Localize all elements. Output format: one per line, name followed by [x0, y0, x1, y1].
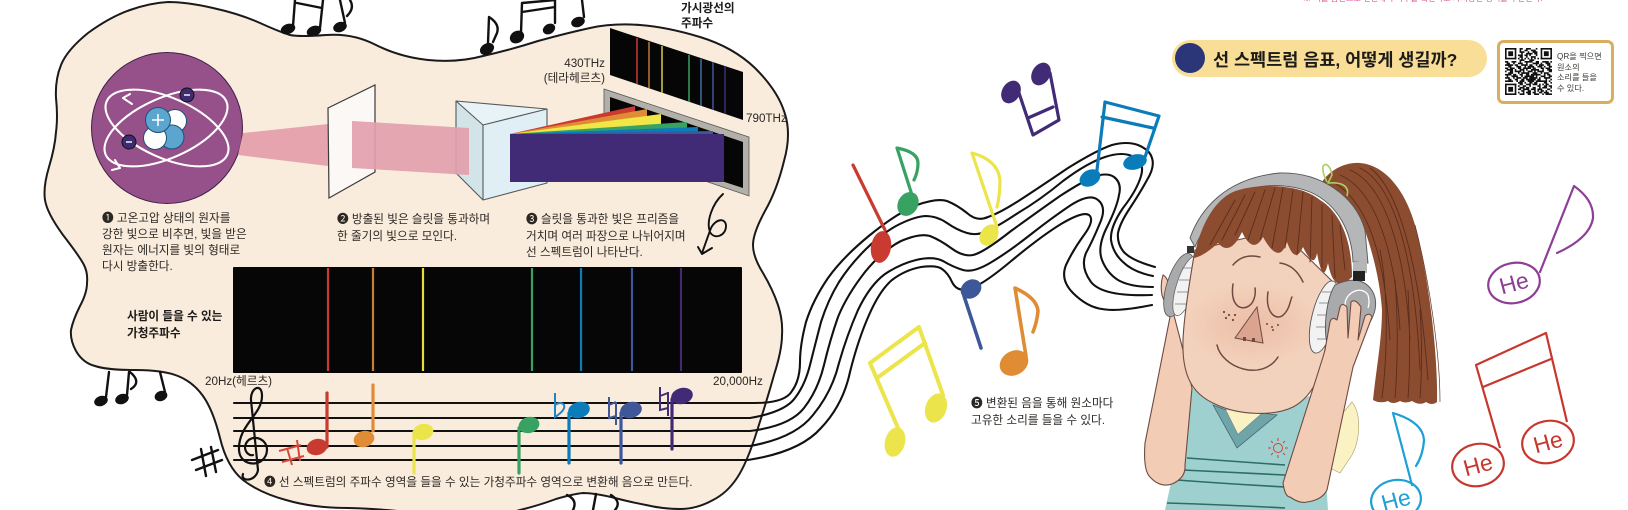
violet natural note [660, 385, 695, 449]
freckles [1223, 311, 1279, 331]
large yellow beamed notes [870, 327, 951, 459]
helium notes, red: He [1530, 426, 1566, 458]
orange note [352, 385, 376, 449]
label: 790THz: 790THz [746, 112, 787, 125]
step 3 text: ❸ 슬릿을 통과한 빛은 프리즘을 [526, 213, 679, 226]
step 3 text [526, 213, 686, 259]
blue flat note [555, 393, 592, 463]
step 3 text: 선 스펙트럼이 나타난다. [526, 246, 643, 259]
label: 430THz: 430THz [564, 57, 605, 70]
audible frequency spectrum [233, 267, 742, 373]
heading: visible light frequency: 가시광선의 [681, 1, 735, 15]
helium notes, red: He [1460, 449, 1496, 481]
helium note, purple: He [1496, 267, 1532, 299]
step 5 text [971, 396, 1114, 427]
floating coloured notes [853, 59, 1159, 459]
green note [893, 148, 923, 220]
blue beamed notes [1077, 102, 1159, 190]
label: 430THz: (테라헤르츠) [544, 72, 605, 85]
prism [456, 101, 547, 200]
music staff flowing to the ear [234, 143, 1155, 460]
bangs hair [1194, 186, 1352, 284]
QR caption: QR을 찍으면 [1557, 51, 1602, 61]
helium note, blue [1368, 413, 1424, 510]
helium note, purple [1484, 186, 1593, 308]
icon: excited atom [92, 52, 242, 204]
black sharp sign [192, 447, 222, 476]
red note [853, 165, 894, 264]
black notes under left lobe [93, 372, 169, 408]
nose [1235, 307, 1263, 343]
QR caption: 소리를 들을 [1557, 73, 1597, 82]
left ear cup [1157, 246, 1205, 320]
black notes on the outline, top left [279, 0, 352, 38]
grey screen behind the spectrum [604, 89, 749, 196]
orange note [995, 288, 1038, 381]
step 5 text: 고유한 소리를 들을 수 있다. [971, 414, 1105, 427]
step 2 text [337, 212, 490, 243]
step 1 text: ❶ 고온고압 상태의 원자를 [102, 211, 231, 225]
step 2 text: 한 줄기의 빛으로 모인다. [337, 230, 457, 243]
label: 430THz [544, 57, 605, 85]
headband [1190, 173, 1368, 263]
step 4 text: ❹ 선 스펙트럼의 주파수 영역을 들을 수 있는 가청주파수 영역으로 변환해 음으로 만든다. [264, 476, 693, 489]
label: audible frequency: 가청주파수 [127, 326, 181, 340]
panel: guitar-shaped cream background [44, 2, 788, 510]
step 5 text: ❺ 변환된 음을 통해 원소마다 [971, 396, 1114, 410]
yellow sleeve [1320, 402, 1359, 473]
label: audible frequency [127, 310, 223, 340]
light beam from atom to slit [238, 124, 328, 166]
step 1 text: 다시 방출한다. [102, 260, 173, 273]
QR code [1505, 48, 1552, 95]
left arm [1145, 275, 1192, 485]
visible light frequency spectrum [610, 28, 743, 120]
green hair tie [1323, 165, 1348, 196]
indigo note [957, 275, 985, 348]
black notes in bottom notch [567, 494, 618, 510]
yellow note [972, 153, 1003, 249]
QR callout [1498, 42, 1612, 102]
QR caption: 원소의 [1557, 62, 1580, 72]
icon: sun emblem [1268, 438, 1288, 458]
illustration: girl with headphones [1145, 163, 1440, 510]
label: 20Hz: 20Hz(헤르츠) [205, 375, 272, 388]
arrow: spectrum to audible range [698, 194, 726, 254]
black notes on the outline, top centre [478, 0, 586, 58]
title pill: 선 스펙트럼 음표, 어떻게 생길까? [1213, 50, 1457, 70]
heading: visible light frequency [681, 1, 735, 30]
shirt [1165, 388, 1328, 510]
step 1 text: 강한 빛으로 비추면, 빛을 받은 [102, 228, 247, 241]
step 1 text [102, 211, 247, 273]
ponytail [1322, 163, 1440, 404]
label: audible frequency: 사람이 들을 수 있는 [127, 310, 223, 323]
right ear cup [1303, 262, 1376, 356]
indigo natural note [609, 397, 644, 463]
yellow note [411, 422, 435, 473]
slit card [328, 85, 375, 198]
right arm and hand [1283, 301, 1372, 502]
treble clef [239, 388, 267, 480]
heading: visible light frequency: 주파수 [681, 17, 713, 30]
red sharp note [279, 393, 329, 465]
step 2 text: ❷ 방출된 빛은 슬릿을 통과하며 [337, 212, 490, 226]
QR caption: 수 있다. [1557, 83, 1584, 93]
purple beamed notes [997, 59, 1059, 135]
title pill [1172, 40, 1487, 77]
dispersed rainbow fan [510, 106, 724, 182]
step 3 text: 거치며 여러 파장으로 나뉘어지며 [526, 230, 686, 243]
helium notes, red [1448, 333, 1578, 491]
face [1183, 230, 1334, 413]
green note [517, 415, 541, 473]
label: 20,000Hz: 20,000Hz [713, 375, 763, 388]
QR caption [1557, 51, 1602, 93]
step 1 text: 원자는 에너지를 빛의 형태로 [102, 243, 241, 257]
beam through slit and prism [352, 121, 469, 175]
notes on staff [279, 385, 695, 473]
